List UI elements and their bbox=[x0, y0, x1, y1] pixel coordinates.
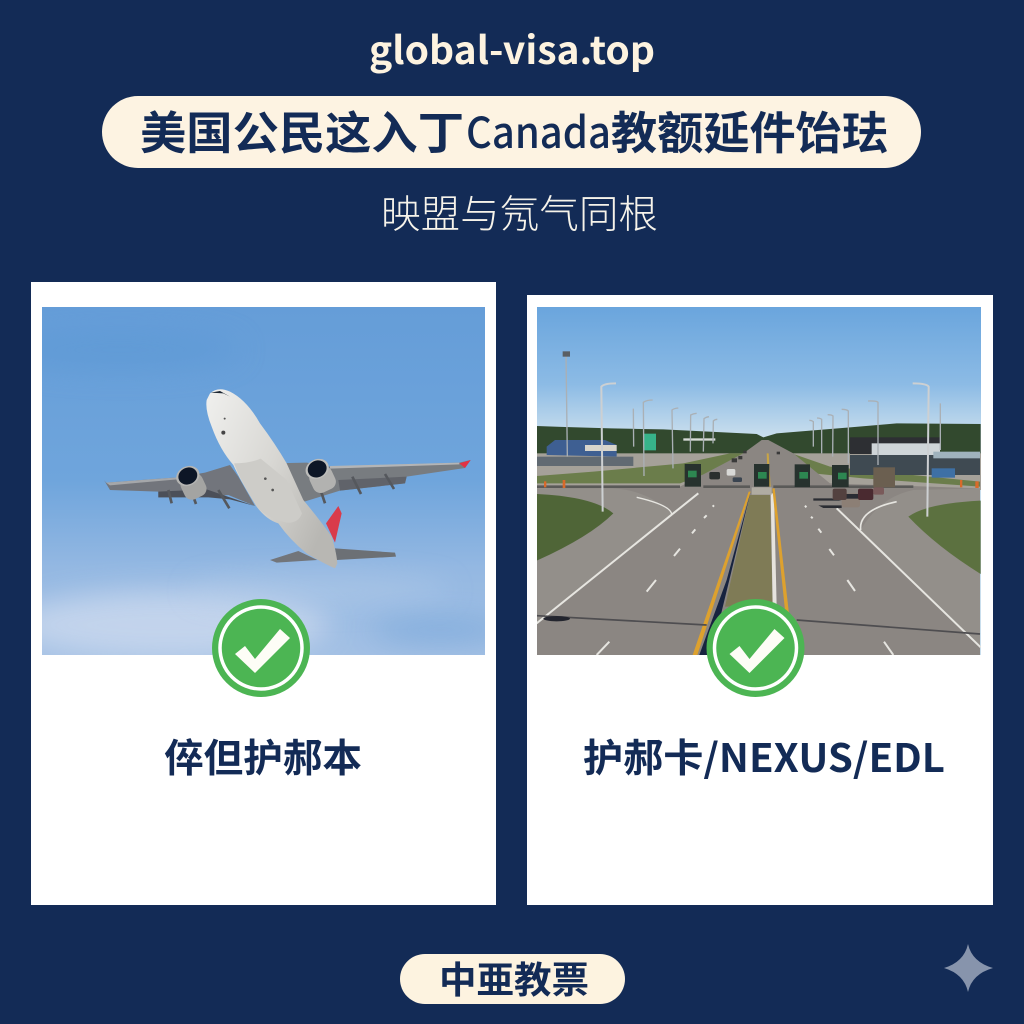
photo: border crossing highway bbox=[537, 307, 982, 657]
buildings bbox=[547, 440, 617, 457]
photo: airplane in sky bbox=[42, 307, 485, 655]
label: passport card and documents: 护郝卡/NEXUS/EDL bbox=[583, 728, 945, 784]
panel: land travel bbox=[527, 295, 993, 905]
title pill bbox=[102, 96, 921, 168]
booths bbox=[685, 464, 849, 487]
subtitle: 映盟与氖气同根 bbox=[381, 184, 658, 240]
overhead shadow bbox=[537, 616, 980, 634]
title pill: 教额延件饴珐 bbox=[611, 97, 888, 162]
title pill: 美国公民这入丁 bbox=[140, 97, 464, 162]
icon: green check bbox=[212, 599, 310, 697]
lane lines bbox=[537, 493, 981, 655]
grass bbox=[537, 494, 613, 561]
icon: sparkle star bbox=[944, 944, 993, 992]
road bbox=[537, 440, 980, 657]
sign bbox=[644, 434, 656, 450]
cars bbox=[709, 451, 884, 508]
light poles bbox=[601, 383, 929, 517]
footer pill: 中亜教票 bbox=[439, 950, 589, 1004]
plaza strip bbox=[537, 485, 913, 488]
icon: green check bbox=[706, 599, 804, 697]
label: passport book: 倅但护郝本 bbox=[164, 728, 362, 784]
title pill: Canada bbox=[466, 99, 611, 161]
footer pill bbox=[400, 950, 625, 1004]
panel: air travel bbox=[0, 282, 510, 905]
site name: global-visa.top bbox=[369, 20, 655, 75]
